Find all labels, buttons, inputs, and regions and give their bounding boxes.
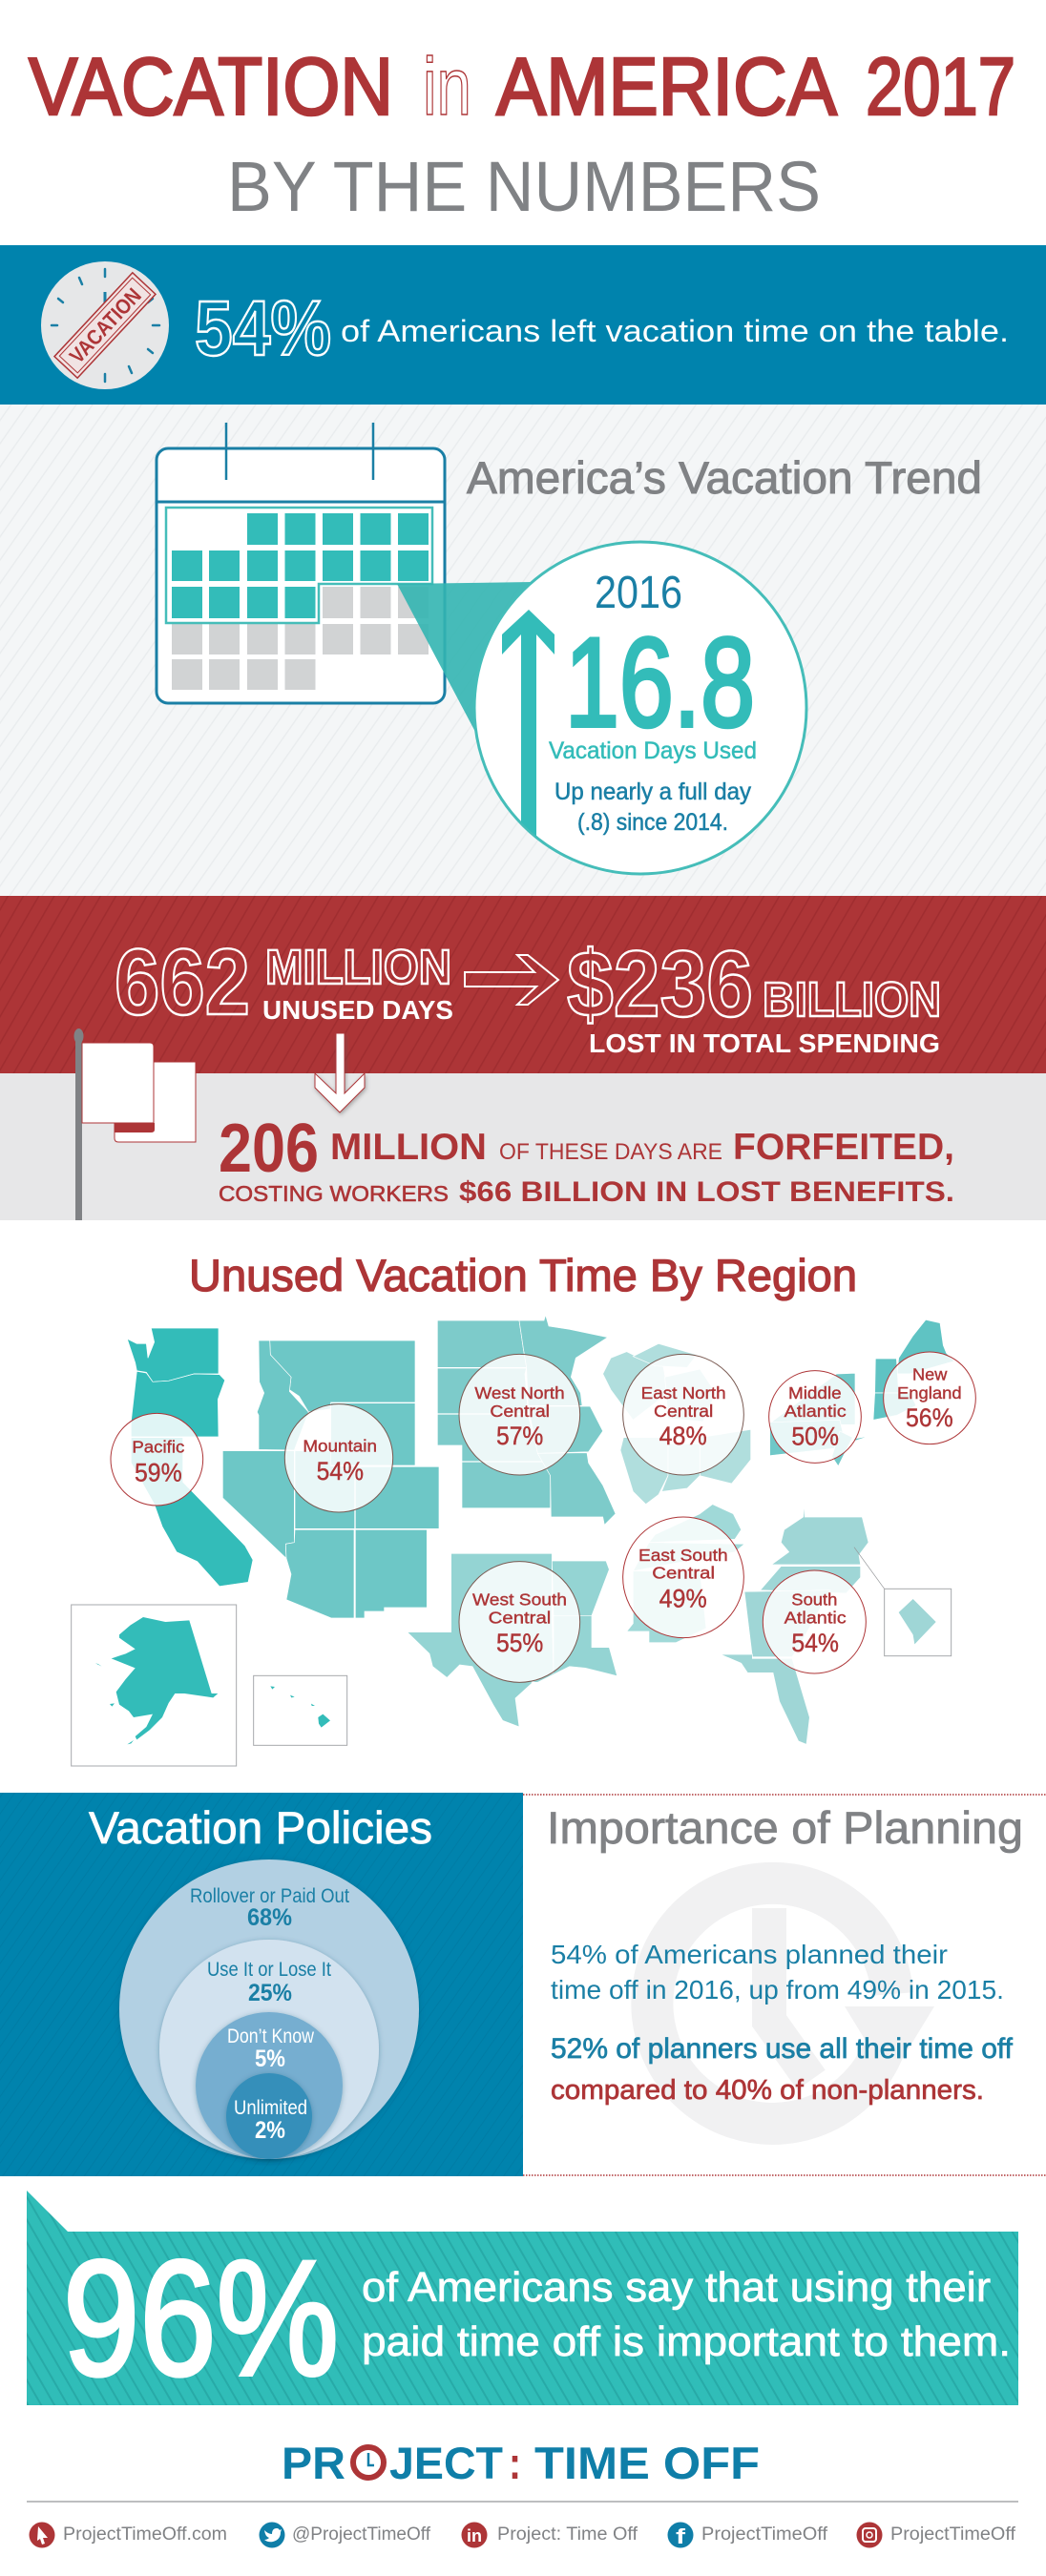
icon: clock with vacation stamp: VACATION	[65, 283, 146, 368]
footer: linkedin	[462, 2523, 638, 2547]
stat: 236 billion	[567, 931, 941, 1058]
text: planned: 54% of Americans planned their	[551, 1940, 948, 1969]
panel: unused days	[0, 896, 1046, 1220]
banner text	[362, 2264, 1011, 2365]
icon: linkedin	[462, 2523, 487, 2547]
callout: middle atlantic: Atlantic	[784, 1402, 847, 1421]
callout: mountain: 54%	[317, 1457, 364, 1485]
label: rollover	[190, 1885, 349, 1931]
icon: logo clock ring	[353, 2447, 384, 2478]
stat: 206 million forfeited: $66 BILLION IN LOST BENEFITS.	[459, 1176, 954, 1208]
callout: east north central: East North	[641, 1383, 726, 1402]
stat: 662 million: 662	[115, 929, 250, 1034]
stat: 236 billion: BILLION	[763, 972, 941, 1027]
stat: 206 million forfeited: COSTING WORKERS	[219, 1181, 449, 1206]
callout: west north central	[459, 1354, 580, 1475]
footer: twitter	[260, 2523, 431, 2547]
region: mountain	[222, 1340, 439, 1618]
text: planners: 52% of planners use all their time off	[551, 2033, 1014, 2065]
label: unlimited: Unlimited	[234, 2097, 307, 2119]
text: planners	[551, 2033, 1014, 2106]
panel: vacation policies	[0, 1793, 523, 2176]
inset: hawaii	[254, 1675, 347, 1745]
icon: calendar	[157, 423, 445, 703]
callout: 16.8 days	[474, 542, 806, 874]
logo: project time off: PR	[282, 2438, 345, 2488]
footer: website: ProjectTimeOff.com	[63, 2524, 227, 2545]
heading: America’s Vacation Trend	[467, 452, 982, 503]
text: planners: compared to 40% of non-planners.	[551, 2075, 984, 2106]
callout: east north central	[623, 1354, 743, 1475]
icon: flag	[74, 1028, 196, 1220]
stat: 206 million forfeited: OF THESE DAYS ARE	[499, 1139, 722, 1165]
zoom cone	[397, 582, 533, 732]
callout: east south central	[623, 1517, 743, 1638]
icon: up arrow	[502, 610, 554, 859]
icon: facebook: f	[676, 2524, 686, 2548]
stat: 662 million: UNUSED DAYS	[262, 995, 453, 1025]
panel: importance of planning	[523, 1795, 1046, 2175]
callout: west south central	[459, 1562, 580, 1682]
footer: facebook: ProjectTimeOff	[701, 2524, 828, 2545]
callout: mountain: Mountain	[303, 1437, 377, 1456]
callout: east north central: 48%	[659, 1422, 707, 1450]
label: use it or lose it: Use It or Lose It	[207, 1959, 331, 1981]
callout: middle atlantic	[769, 1371, 861, 1463]
title: in	[423, 42, 471, 133]
footer: website	[29, 2523, 227, 2547]
callout: east south central: East South	[638, 1546, 728, 1565]
icon: twitter	[260, 2523, 284, 2547]
subtitle: BY THE NUMBERS	[227, 147, 821, 226]
stat: 662 million: MILLION	[265, 940, 451, 994]
stat: 236 billion: $236	[567, 931, 753, 1036]
region: pacific	[127, 1328, 253, 1587]
callout: west south central: West South	[472, 1590, 567, 1610]
logo: project time off: TIME OFF	[534, 2438, 760, 2488]
callout: west north central: 57%	[496, 1422, 543, 1450]
banner text: paid time off is important to them.	[362, 2318, 1011, 2365]
callout: new england	[884, 1352, 975, 1444]
callout: east south central: Central	[652, 1563, 715, 1582]
heading: Vacation Policies	[89, 1802, 432, 1853]
note: (.8) since 2014.	[577, 809, 728, 836]
label: don't know	[227, 2025, 315, 2072]
callout: east south central: 49%	[659, 1584, 707, 1612]
panel: 54% banner	[0, 245, 1046, 405]
region: south atlantic	[721, 1503, 868, 1744]
inset: alaska	[72, 1605, 237, 1766]
label: unlimited: 2%	[255, 2117, 285, 2144]
title: AMERICA	[496, 42, 837, 133]
nested circle chart	[119, 1859, 419, 2159]
stat: 236 billion: LOST IN TOTAL SPENDING	[589, 1028, 940, 1058]
heading: Importance of Planning	[547, 1802, 1023, 1853]
callout: new england: 56%	[906, 1403, 953, 1432]
stat 54%: 54%	[195, 285, 331, 372]
logo: project time off: :	[509, 2438, 521, 2488]
stat: 206 million forfeited	[219, 1111, 954, 1208]
callout: south atlantic: South	[791, 1590, 837, 1610]
icon: clock with vacation stamp	[41, 261, 169, 389]
callout: mountain	[284, 1404, 393, 1512]
footer: twitter: @ProjectTimeOff	[292, 2524, 431, 2545]
footer: facebook	[668, 2523, 828, 2548]
label: don't know: Don’t Know	[227, 2025, 315, 2047]
callout: west south central: 55%	[496, 1629, 543, 1657]
stat: 206 million forfeited: MILLION	[330, 1127, 487, 1168]
map of US regions	[72, 1315, 975, 1766]
label: unlimited	[234, 2097, 307, 2144]
watermark clock	[652, 1883, 934, 2124]
heading: unused by region: Unused Vacation Time By Region	[189, 1250, 857, 1300]
icon: facebook	[668, 2523, 693, 2548]
title: VACATION	[29, 42, 393, 133]
callout: west north central: West North	[474, 1383, 565, 1402]
region: east south central	[627, 1505, 744, 1643]
panel: America's vacation trend	[0, 405, 1046, 897]
icon: instagram	[857, 2523, 882, 2547]
panel: 96% banner	[27, 2191, 1018, 2410]
region: west north central	[437, 1315, 616, 1525]
callout: pacific	[111, 1413, 203, 1506]
callout: middle atlantic: Middle	[788, 1383, 842, 1402]
footer: instagram: ProjectTimeOff	[890, 2524, 1016, 2545]
label: rollover: 68%	[247, 1904, 292, 1931]
text: planned: time off in 2016, up from 49% in 2015.	[551, 1975, 1004, 2005]
stat: 662 million	[115, 929, 453, 1034]
label: rollover: Rollover or Paid Out	[190, 1885, 349, 1907]
label: use it or lose it: 25%	[248, 1980, 292, 2006]
stat: 206 million forfeited: FORFEITED,	[733, 1127, 954, 1168]
label: don't know: 5%	[255, 2046, 285, 2072]
icon: linkedin: in	[467, 2526, 482, 2545]
callout: south atlantic: Atlantic	[784, 1609, 847, 1628]
stat 96%: 96%	[63, 2227, 339, 2410]
note: Up nearly a full day	[554, 779, 751, 805]
note	[554, 779, 751, 836]
region: west south central	[408, 1553, 617, 1727]
banner text: of Americans say that using their	[362, 2264, 991, 2311]
arrow: right	[465, 955, 558, 1005]
region: east north central	[603, 1343, 751, 1505]
callout: east north central: Central	[654, 1402, 713, 1421]
callout: new england: New	[912, 1365, 948, 1384]
banner text: of Americans left vacation time on the table.	[341, 314, 1009, 348]
logo: project time off	[282, 2438, 760, 2488]
callout: west south central: Central	[489, 1609, 551, 1628]
callout: pacific: Pacific	[132, 1438, 184, 1457]
callout: pacific: 59%	[135, 1459, 182, 1487]
region: new england	[873, 1319, 954, 1420]
callout: south atlantic: 54%	[791, 1629, 839, 1657]
callout: middle atlantic: 50%	[791, 1422, 839, 1450]
year: 2016	[595, 568, 682, 618]
region: middle atlantic	[770, 1373, 870, 1466]
callout: west north central: Central	[490, 1402, 550, 1421]
callout: south atlantic	[763, 1570, 866, 1673]
stat: 206 million forfeited: 206	[219, 1111, 319, 1187]
logo: project time off: JECT	[389, 2438, 503, 2488]
footer: instagram	[857, 2523, 1016, 2547]
caption: Vacation Days Used	[549, 737, 757, 764]
inset: district of columbia	[854, 1548, 952, 1656]
big number: 16.8	[565, 613, 755, 754]
label: use it or lose it	[207, 1959, 331, 2006]
arrow: down	[315, 1033, 365, 1112]
title: 2017	[866, 42, 1015, 133]
icon: cursor	[29, 2523, 55, 2547]
text: planned	[551, 1940, 1004, 2005]
footer: linkedin: Project: Time Off	[497, 2524, 638, 2545]
callout: new england: England	[897, 1383, 962, 1402]
title	[29, 42, 1015, 133]
